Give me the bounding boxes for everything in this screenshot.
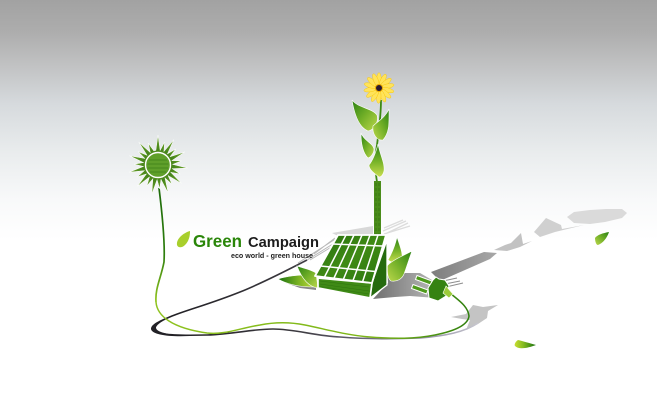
shadow: streaks by plug (443, 278, 463, 287)
cast shadow (286, 209, 627, 330)
sun rays (128, 135, 188, 195)
sunflower stem (156, 188, 164, 302)
icon: yellow daisy (364, 73, 394, 103)
solar panel house (315, 235, 387, 298)
leaf upper left (352, 100, 377, 131)
icon: plug (412, 276, 453, 301)
green cord (156, 293, 469, 338)
right side wall (370, 240, 387, 298)
heading: Green Campaign: Green (193, 231, 242, 251)
plug prongs (412, 276, 432, 294)
panel grid (320, 235, 383, 282)
daisy plant (352, 73, 394, 236)
title (193, 231, 319, 260)
shadow: solar house (373, 268, 436, 299)
plug body (428, 277, 449, 301)
leaves behind the house, right (387, 237, 412, 281)
floating leaf bottom (515, 340, 536, 348)
black cord thick curve (151, 316, 190, 336)
solar panel roof (315, 235, 386, 283)
icon: title leaf (177, 231, 190, 247)
shadow: streaks left of panel (298, 238, 337, 263)
leaf lower centre (369, 144, 384, 177)
plant stem (376, 100, 381, 182)
floating leaf upper right (595, 232, 609, 245)
shadow: left leaves (286, 283, 316, 290)
subtitle: eco world - green house (231, 251, 313, 260)
sun disc (144, 150, 172, 180)
front wall (318, 278, 372, 298)
chimney (374, 181, 381, 236)
icon: sun flower (128, 135, 188, 195)
leaves at left of the house (278, 266, 318, 288)
leaf upper right (373, 109, 389, 140)
shadow: flower head (567, 209, 627, 224)
shadow: leaves on ground (494, 233, 532, 251)
black cord with shadow (152, 260, 478, 339)
leaf lower left (361, 133, 374, 158)
shadow: chimney and stem (431, 252, 497, 281)
shadow: streaks behind chimney (383, 220, 410, 235)
title: Campaign (248, 235, 319, 251)
shadow: plug (451, 305, 498, 330)
plug strain relief (443, 286, 453, 298)
